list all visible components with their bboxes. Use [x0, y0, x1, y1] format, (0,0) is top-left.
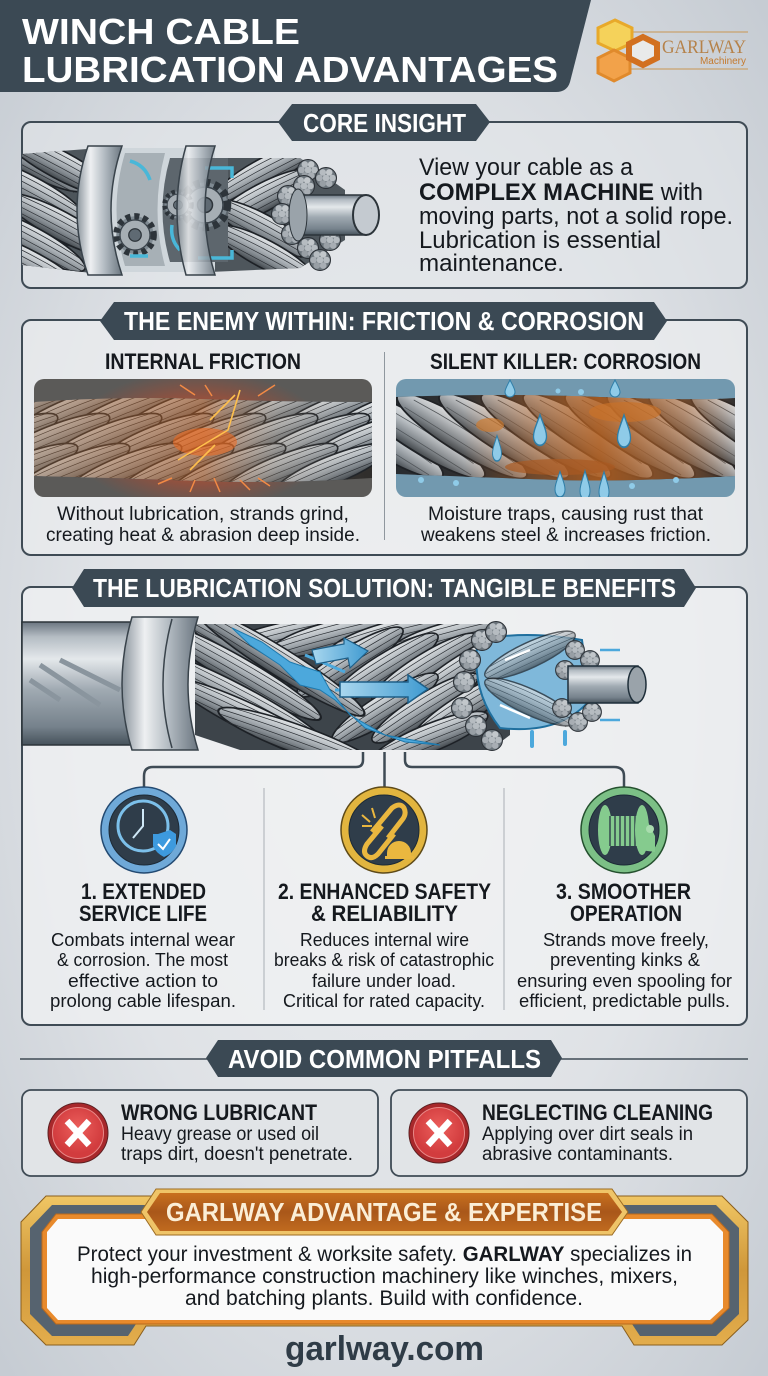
Garlway text: and batching plants. Build with confidence.	[185, 1287, 583, 1310]
core insight text: moving parts, not a solid rope.	[419, 203, 733, 230]
benefit 3: smoother operation: OPERATION	[570, 901, 682, 926]
badge: enemy within: THE ENEMY WITHIN: FRICTION & CORROSION	[124, 306, 644, 336]
benefit 3: smoother operation	[517, 787, 732, 1011]
badge: Garlway advantage: GARLWAY ADVANTAGE & EXPERTISE	[166, 1197, 602, 1227]
white text panel	[47, 1219, 723, 1320]
benefit 2: enhanced safety: 2. ENHANCED SAFETY	[278, 879, 491, 904]
benefit 1: extended service life	[50, 787, 236, 1011]
icon: red cross	[409, 1103, 469, 1163]
benefit 3: smoother operation: efficient, predictable pulls.	[519, 990, 730, 1011]
strands behind the gears	[215, 158, 345, 272]
core insight text: COMPLEX MACHINE with	[419, 179, 703, 206]
image: frayed rope with sparks	[34, 379, 372, 497]
column: silent killer corrosion: Moisture traps, causing rust that	[428, 503, 704, 525]
column: silent killer corrosion: weakens steel & increases friction.	[420, 524, 711, 546]
badge: core insight: CORE INSIGHT	[303, 108, 466, 138]
benefit 2: enhanced safety: failure under load.	[312, 970, 456, 991]
badge: lubrication solution: THE LUBRICATION SOLUTION: TANGIBLE BENEFITS	[93, 573, 676, 603]
column: silent killer corrosion: SILENT KILLER: CORROSION	[430, 349, 701, 374]
arrow: large lube flow	[340, 675, 428, 703]
icon: red cross	[48, 1103, 108, 1163]
benefit 1: extended service life: & corrosion. The most	[57, 949, 228, 970]
benefit 3: smoother operation: Strands move freely,	[543, 929, 709, 950]
benefit 3: smoother operation: 3. SMOOTHER	[556, 879, 691, 904]
panel: core insight	[21, 104, 748, 289]
panel: Garlway advantage	[21, 1189, 748, 1345]
image: rusted wet rope	[396, 379, 735, 497]
core insight text: View your cable as a	[419, 154, 634, 181]
panel: the lubrication solution	[22, 569, 747, 1025]
benefit 2: enhanced safety: Critical for rated capacity.	[283, 990, 485, 1011]
benefit 2: enhanced safety: Reduces internal wire	[300, 929, 469, 950]
collar	[77, 146, 122, 275]
badge: Garlway advantage	[141, 1189, 628, 1235]
pitfall: neglecting cleaning: NEGLECTING CLEANING	[482, 1100, 713, 1125]
collar	[122, 617, 198, 750]
benefit 1: extended service life: SERVICE LIFE	[79, 901, 207, 926]
core insight text: maintenance.	[419, 250, 564, 277]
pitfall: neglecting cleaning	[391, 1090, 747, 1176]
logo: Garlway Machinery	[598, 20, 748, 81]
icon: clock and shield	[101, 787, 187, 873]
title heading: LUBRICATION ADVANTAGES	[22, 49, 558, 90]
pitfall: wrong lubricant	[22, 1090, 378, 1176]
benefit 3: smoother operation: preventing kinks &	[550, 949, 701, 970]
column: silent killer corrosion	[396, 354, 735, 541]
benefit 1: extended service life: Combats internal wear	[51, 929, 235, 950]
benefit 2: enhanced safety: & RELIABILITY	[311, 901, 458, 926]
benefit 1: extended service life: effective action to	[68, 970, 218, 991]
Garlway text: high-performance construction machinery like winches, mixers,	[91, 1265, 678, 1288]
icon: winch drum	[581, 787, 667, 873]
core rod	[304, 195, 366, 235]
benefit 1: extended service life: prolong cable lifespan.	[50, 990, 236, 1011]
exposed inner strands	[476, 635, 590, 729]
Garlway text: Protect your investment & worksite safety. GARLWAY specializes in	[77, 1243, 692, 1266]
pitfall: neglecting cleaning: abrasive contaminants.	[482, 1144, 673, 1165]
benefit 2: enhanced safety	[274, 787, 494, 1011]
column: internal friction: INTERNAL FRICTION	[105, 349, 301, 374]
title heading: WINCH CABLE	[22, 11, 300, 52]
icon: chain link and hard hat	[341, 787, 427, 873]
section: avoid common pitfalls	[20, 1040, 748, 1176]
logo: Garlway Machinery: GARLWAY	[662, 37, 746, 58]
title heading	[22, 11, 558, 90]
Garlway text	[77, 1243, 692, 1310]
column: internal friction: Without lubrication, strands grind,	[57, 503, 349, 525]
panel: the enemy within	[0, 302, 768, 555]
illustration: cable as machine cutaway	[22, 145, 380, 276]
pitfall: wrong lubricant: WRONG LUBRICANT	[121, 1100, 317, 1125]
benefit 1: extended service life: 1. EXTENDED	[81, 879, 206, 904]
cut sleeve	[100, 148, 215, 272]
core insight text	[419, 154, 733, 277]
title banner	[0, 0, 591, 92]
column: internal friction: creating heat & abrasion deep inside.	[46, 524, 360, 546]
pitfall: wrong lubricant: Heavy grease or used oil	[121, 1124, 319, 1145]
core insight text: Lubrication is essential	[419, 227, 661, 254]
core rod	[568, 666, 638, 703]
logo: Garlway Machinery: Machinery	[700, 56, 746, 67]
pitfall: neglecting cleaning: Applying over dirt seals in	[482, 1124, 693, 1145]
illustration: lubricant penetrating cable	[21, 616, 647, 751]
badge: avoid common pitfalls: AVOID COMMON PITFALLS	[228, 1044, 541, 1074]
arrow: upper lube flow	[312, 638, 368, 668]
benefit 2: enhanced safety: breaks & risk of catastrophic	[274, 949, 494, 970]
footer url: garlway.com	[285, 1330, 484, 1368]
blue lubricant flow	[232, 628, 440, 745]
connector lines	[144, 752, 624, 788]
column: internal friction	[34, 354, 372, 545]
pitfall: wrong lubricant: traps dirt, doesn't penetrate.	[121, 1144, 353, 1165]
benefit 3: smoother operation: ensuring even spooling for	[517, 970, 732, 991]
